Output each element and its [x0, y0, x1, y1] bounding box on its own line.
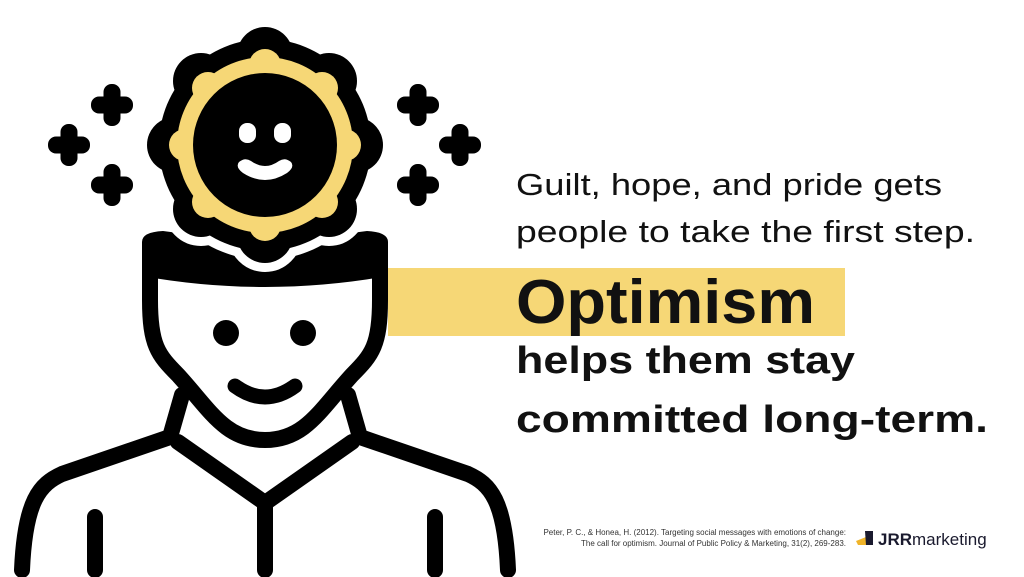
- intro text: people to take the first step.: [516, 214, 975, 249]
- logo: JRR marketing: JRRmarketing: [878, 530, 987, 549]
- illustration: person with happy sun: [22, 27, 508, 570]
- bold statement: committed long-term.: [516, 399, 988, 441]
- head top band: [142, 231, 388, 287]
- icon: smiling sun: [147, 27, 383, 263]
- intro text: [516, 167, 975, 249]
- face eyes and mouth: [213, 320, 316, 397]
- intro text: Guilt, hope, and pride gets: [516, 167, 942, 202]
- bold statement: helps them stay: [516, 340, 855, 382]
- bold statement: [516, 340, 988, 441]
- citation: The call for optimism. Journal of Public Policy & Marketing, 31(2), 269-283.: [581, 539, 846, 548]
- icon: sparkles: [48, 84, 481, 206]
- headline: Optimism: Optimism: [516, 268, 815, 337]
- head outline: [22, 250, 508, 570]
- highlight bar: [388, 268, 845, 336]
- citation: Peter, P. C., & Honea, H. (2012). Targeting social messages with emotions of change:: [543, 528, 846, 537]
- citation: [543, 528, 846, 548]
